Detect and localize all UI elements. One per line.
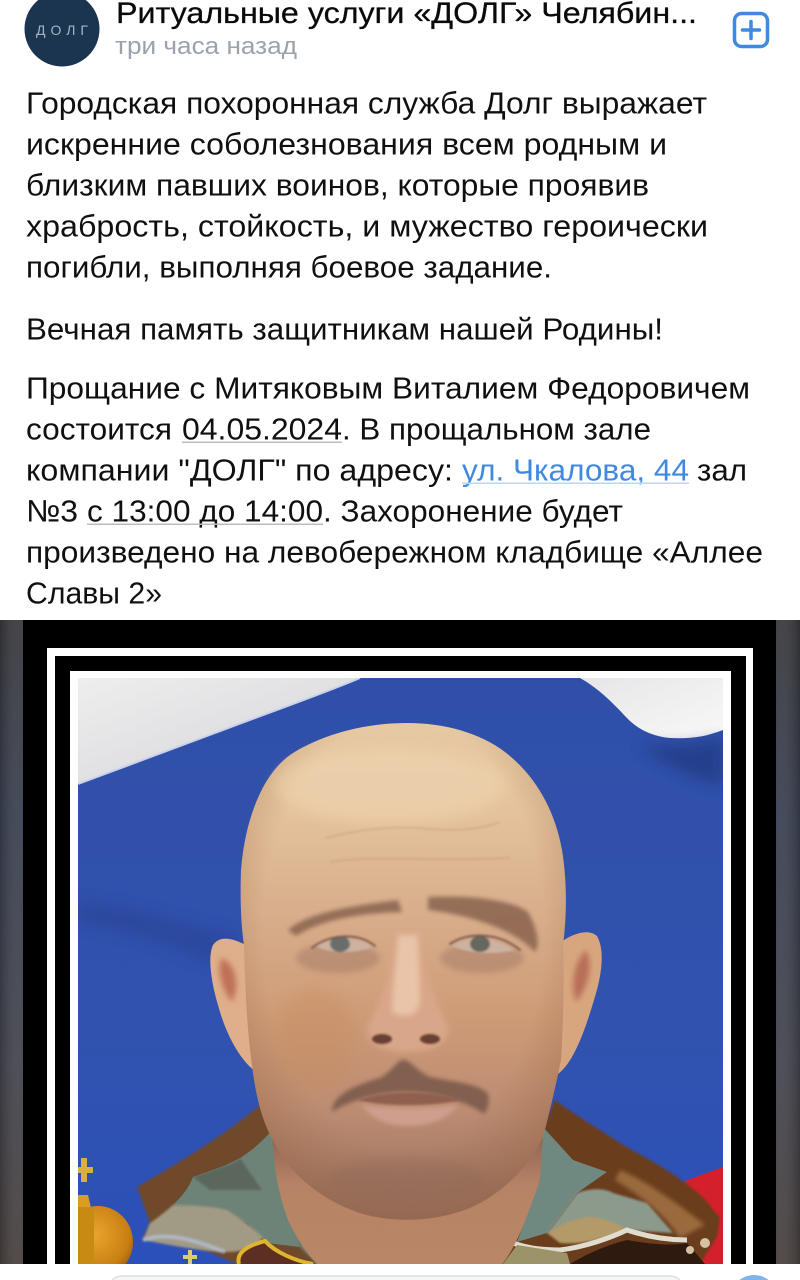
text block: farewell details: 04.05.2024 (182, 412, 342, 446)
blurred side bands (0, 620, 800, 1264)
text block: farewell details: . В прощальном зале (342, 412, 651, 446)
jacket collar (137, 1100, 720, 1264)
text block: condolences: храбрость, стойкость, и мужество героически (26, 208, 708, 244)
eyes (312, 936, 520, 953)
text block: farewell details: Славы 2» (26, 576, 162, 610)
neck (272, 1133, 542, 1264)
right collar (502, 1100, 720, 1264)
text block: farewell details: . Захоронение будет (323, 494, 623, 528)
left collar (137, 1105, 317, 1264)
forehead wrinkles (325, 822, 510, 862)
text block: condolences: искренние соболезнования всем родным и (26, 126, 667, 162)
icon: avatar logo (24, 0, 100, 66)
text block: farewell details (26, 370, 763, 610)
ears (210, 932, 602, 1074)
comment input bar (108, 1275, 778, 1280)
gold orb emblem (78, 1158, 197, 1264)
memorial portrait image (0, 620, 800, 1278)
text block: condolences: погибли, выполняя боевое задание. (26, 250, 552, 284)
text block: condolences: близким павших воинов, которые проявив (26, 168, 649, 202)
black and white mourning frame (23, 620, 776, 1264)
nose (368, 935, 448, 1052)
lips (358, 1092, 462, 1126)
icon: avatar logo: ДОЛГ (36, 22, 88, 38)
eye sockets (296, 943, 524, 973)
face (241, 723, 566, 1220)
icon: send button (730, 1275, 778, 1280)
icon: small cross (183, 1250, 197, 1264)
text block: farewell details: состоится (26, 412, 172, 446)
text block: farewell details: ул. Чкалова, 44 (462, 452, 689, 488)
icon: add button (734, 14, 768, 46)
text block: farewell details: Прощание с Митяковым Виталием Федоровичем (26, 370, 750, 406)
eyebrows (288, 896, 538, 952)
text block: farewell details: компании "ДОЛГ" по адресу: (26, 452, 453, 488)
text block: farewell details: произведено на левобережном кладбище «Аллее (26, 534, 763, 570)
text block: farewell details: зал (697, 452, 747, 488)
collar fill behind neck (298, 1239, 504, 1264)
text block: memory line: Вечная память защитникам нашей Родины! (26, 312, 663, 346)
text block: farewell details: с 13:00 до 14:00 (87, 494, 323, 528)
text block: condolences: Городская похоронная служба Долг выражает (26, 86, 707, 120)
moustache (332, 1060, 489, 1114)
timestamp: три часа назад (115, 33, 297, 60)
text block: condolences (26, 86, 708, 284)
portrait photo (63, 678, 723, 1278)
flag background (78, 678, 723, 1264)
text block: farewell details: №3 (26, 494, 78, 528)
post header (24, 0, 768, 66)
